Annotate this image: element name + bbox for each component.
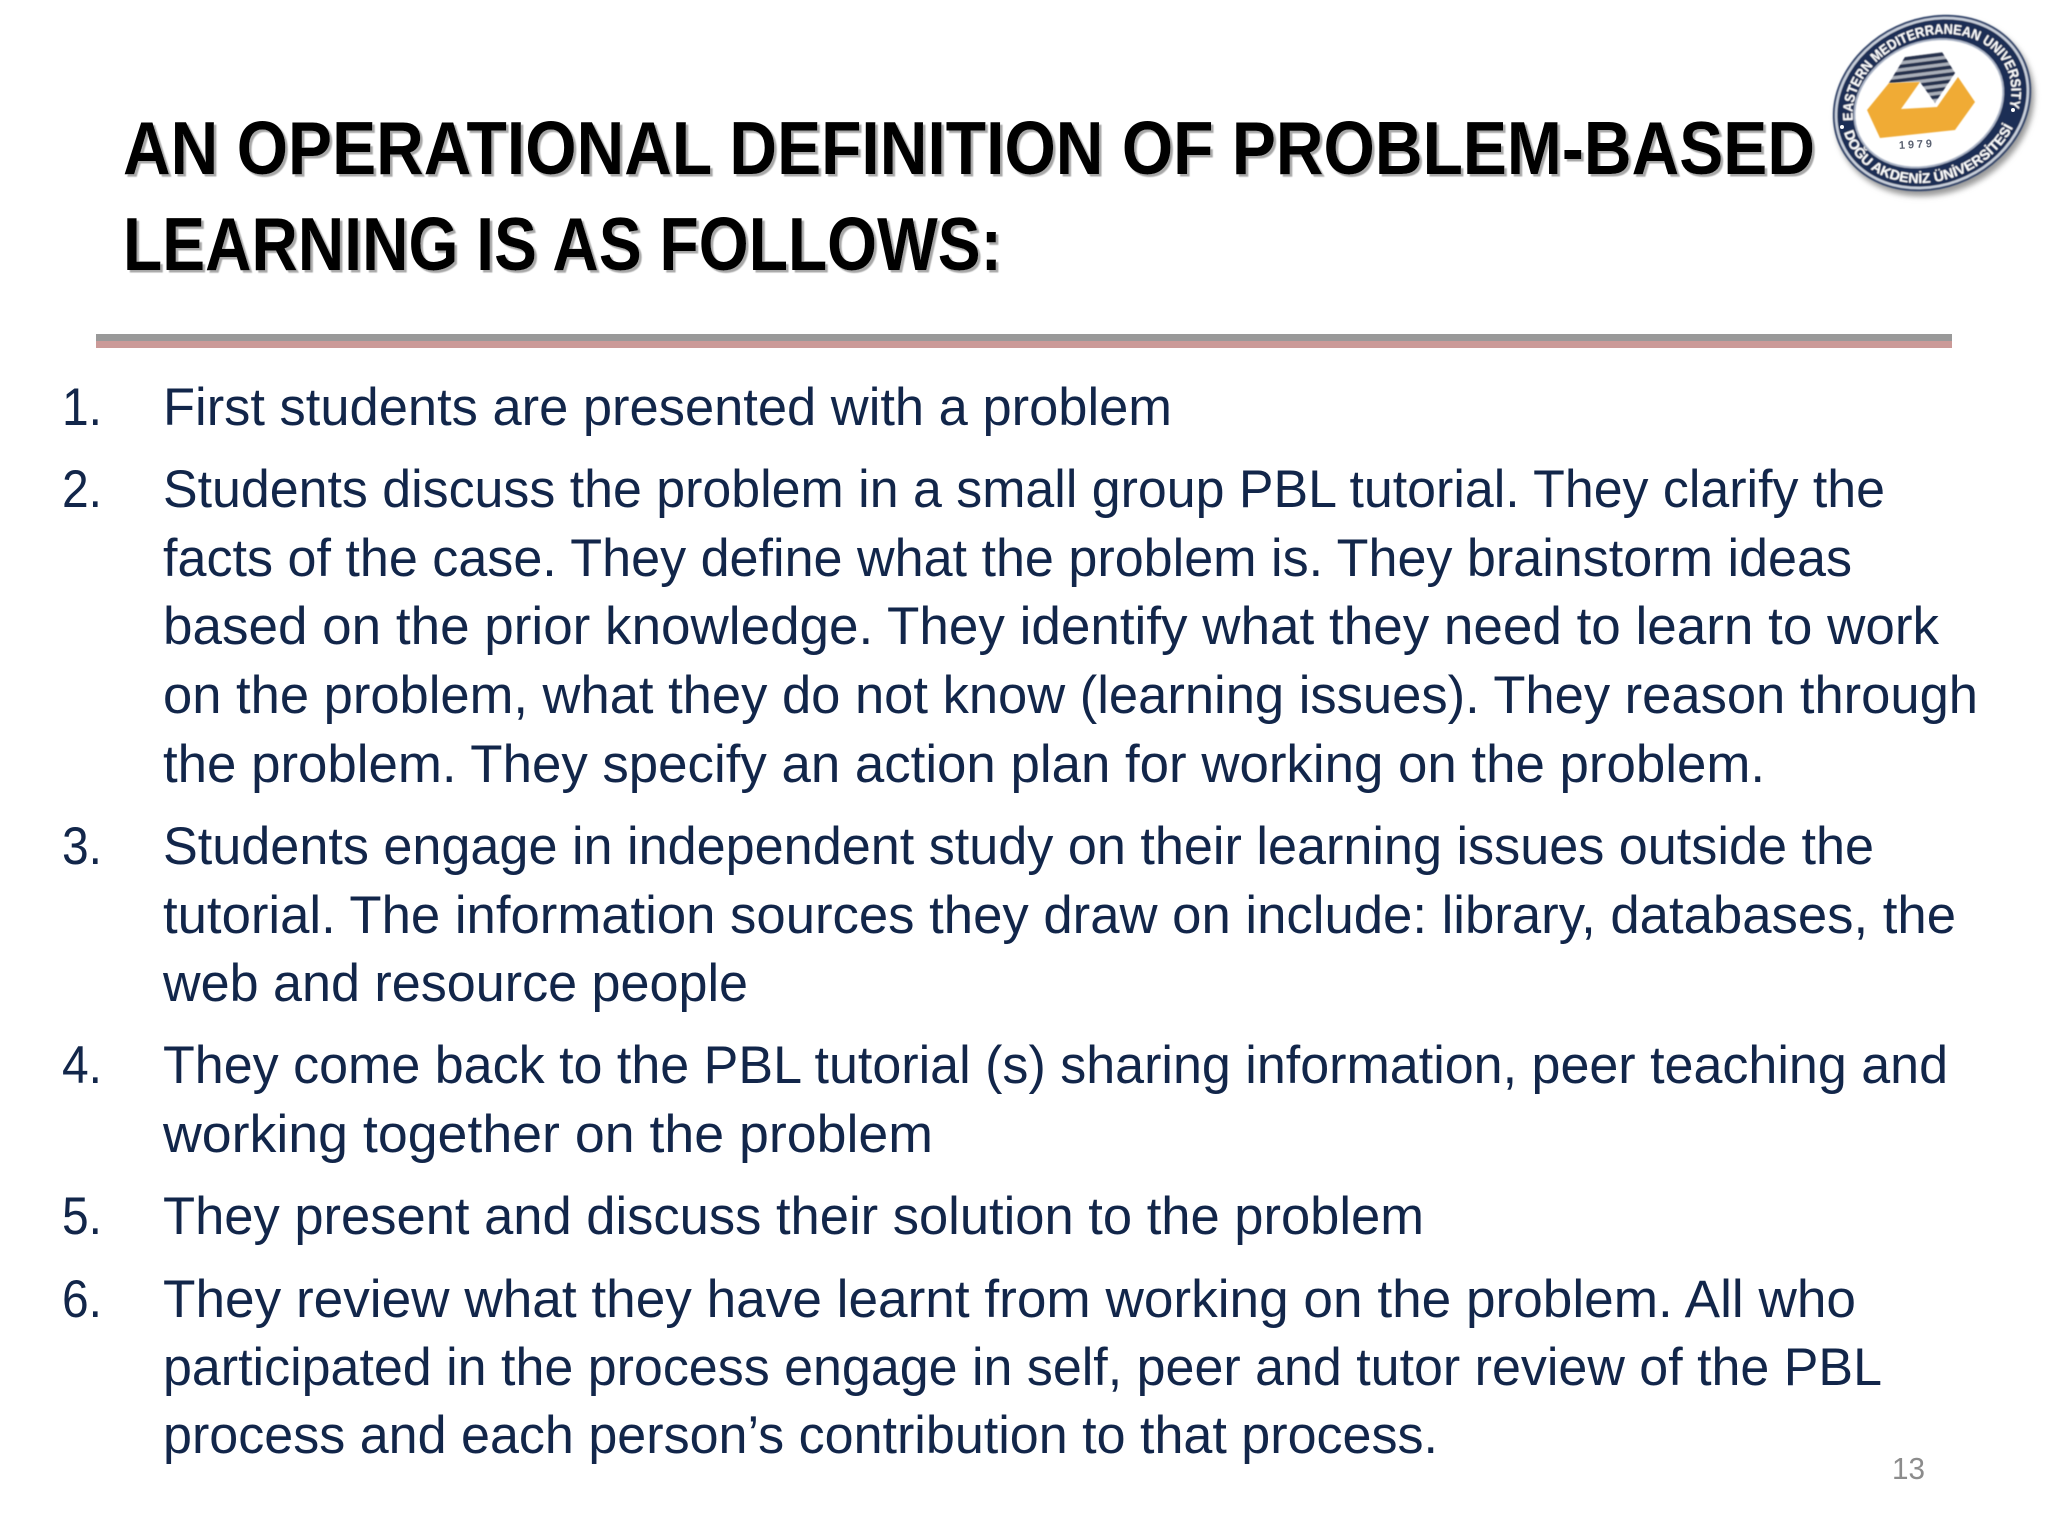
list item 4 <box>62 1036 1948 1164</box>
numbered list <box>62 378 1978 1465</box>
list item 6 <box>62 1270 1882 1465</box>
list item 6: process and each person’s contribution to that process. <box>163 1406 1438 1465</box>
list item 4: They come back to the PBL tutorial (s) sharing information, peer teaching and <box>163 1036 1948 1095</box>
list item 2: facts of the case. They define what the problem is. They brainstorm ideas <box>163 529 1852 588</box>
title <box>123 106 1815 286</box>
icon: striped hexagon <box>1888 52 1956 104</box>
icon: orange chevron <box>1867 77 1975 138</box>
list item 3: 3. <box>62 817 102 876</box>
page number: 13 <box>1892 1451 1925 1486</box>
list item 1: First students are presented with a problem <box>163 378 1172 437</box>
list item 4: working together on the problem <box>162 1105 933 1164</box>
list item 4: 4. <box>62 1036 102 1095</box>
list item 2: on the problem, what they do not know (learning issues). They reason through <box>163 666 1978 725</box>
list item 6: They review what they have learnt from working on the problem. All who <box>163 1270 1856 1329</box>
list item 2: based on the prior knowledge. They identify what they need to learn to work <box>163 597 1939 656</box>
list item 2: Students discuss the problem in a small group PBL tutorial. They clarify the <box>163 460 1885 519</box>
title: LEARNING IS AS FOLLOWS: <box>123 202 1002 286</box>
list item 6: participated in the process engage in self, peer and tutor review of the PBL <box>163 1338 1882 1397</box>
year label: 1979 <box>1899 138 1932 152</box>
icon: university logo seal: DOĞU AKDENİZ ÜNİVERSİTESİ <box>1843 122 2014 184</box>
list item 1: 1. <box>62 378 102 437</box>
list item 3: Students engage in independent study on their learning issues outside the <box>163 817 1874 876</box>
list item 2: the problem. They specify an action plan for working on the problem. <box>163 735 1765 794</box>
title rule <box>96 334 1952 348</box>
list item 3: tutorial. The information sources they draw on include: library, databases, the <box>163 886 1956 945</box>
title: AN OPERATIONAL DEFINITION OF PROBLEM-BASED <box>123 106 1815 190</box>
list item 3: web and resource people <box>162 954 748 1013</box>
list item 6: 6. <box>62 1270 102 1329</box>
list item 5: 5. <box>62 1187 102 1246</box>
icon: university logo seal: EASTERN MEDITERRANEAN UNIVERSITY <box>1842 23 2022 122</box>
list item 2 <box>62 460 1978 794</box>
list item 3 <box>62 817 1956 1013</box>
list item 2: 2. <box>62 460 102 519</box>
list item 5: They present and discuss their solution to the problem <box>163 1187 1424 1246</box>
icon: university logo seal <box>1832 14 2038 200</box>
